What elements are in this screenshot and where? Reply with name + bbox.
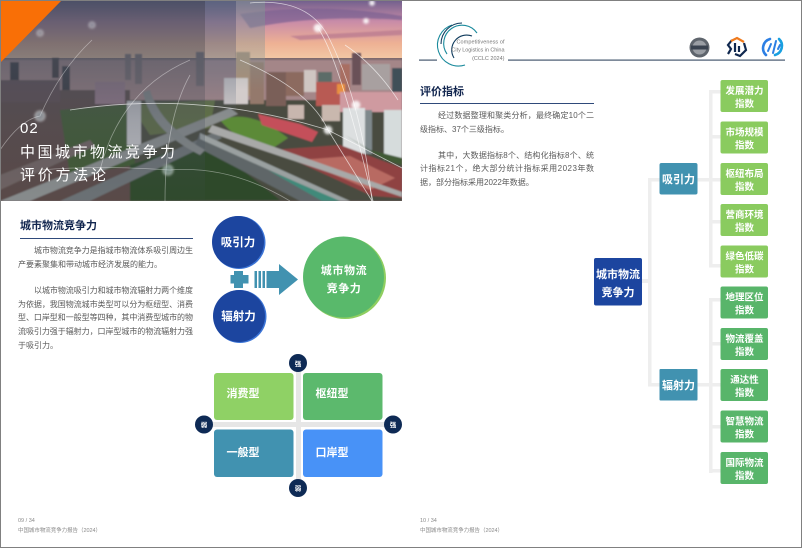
tile: 一般型: 一般型 [226, 445, 260, 459]
right page header logo: Competitiveness of [456, 40, 505, 46]
leaf: 物流覆盖指数 [720, 328, 768, 360]
node: 辐射力 [660, 369, 698, 400]
partner logo: KJ mark [728, 38, 746, 56]
left body text: 型、口岸型和一般型等四种，其中消费型城市的物 [18, 312, 193, 322]
left heading: 城市物流竞争力 [20, 218, 97, 232]
left body text: 为依据，我国物流城市类型可以分为枢纽型、消费 [18, 299, 193, 309]
tile: 枢纽型 [303, 373, 382, 420]
axis badge: top strong [289, 354, 307, 372]
hero title: 中国城市物流竞争力 [20, 143, 175, 161]
concept diagram: attraction + radiation = competitiveness [212, 216, 386, 343]
leaf: 通达性指数 [720, 369, 768, 401]
tree connectors [642, 90, 721, 473]
tree root: 城市物流竞争力 [594, 258, 642, 306]
axis badge: bottom weak: 弱 [295, 484, 302, 492]
leaf: 绿色低碳指数: 指数 [735, 264, 754, 276]
footer left [18, 518, 101, 534]
circle: 辐射力 [213, 290, 266, 343]
orange corner triangle [1, 0, 62, 62]
circle: 城市物流竞争力 [303, 236, 386, 319]
leaf: 枢纽布局指数: 枢纽布局 [725, 168, 764, 180]
leaf: 地理区位指数: 地理区位 [725, 292, 764, 304]
right page header logo: City Logistics in China [452, 48, 505, 54]
skyline right [316, 82, 340, 106]
leaf: 营商环境指数: 营商环境 [725, 209, 764, 221]
leaf: 智慧物流指数: 智慧物流 [725, 416, 764, 428]
right body text: 经过数据整理和聚类分析，最终确定10个二 [438, 110, 594, 120]
right heading rule [420, 103, 594, 104]
icon: plus [230, 271, 248, 288]
node: 辐射力: 辐射力 [662, 378, 695, 392]
hero title [20, 120, 175, 184]
left skyline [10, 62, 19, 80]
left body text: 以城市物流吸引力和城市物流辐射力两个维度 [34, 285, 193, 295]
right body text: 计指标21个，绝大部分统计指标采用2023年数 [420, 163, 594, 173]
tile: 口岸型 [303, 430, 382, 477]
node: 吸引力 [660, 163, 698, 194]
tile: 枢纽型: 枢纽型 [316, 386, 348, 400]
greenery and red roofs [220, 117, 288, 150]
right body text: 其中，大数据指标8个、结构化指标8个、统 [438, 150, 594, 160]
right body text: 据，部分指标采用2022年数据。 [420, 177, 534, 187]
leaf: 物流覆盖指数: 指数 [735, 346, 754, 358]
right heading: 评价指标 [420, 84, 464, 98]
axis badge: left weak: 弱 [201, 421, 208, 429]
leaf: 国际物流指数 [720, 452, 768, 484]
leaf: 通达性指数: 指数 [735, 387, 754, 399]
network arcs and glowing nodes [0, 0, 402, 201]
axis badge: bottom weak [289, 479, 307, 497]
footer left: 中国城市物流竞争力报告（2024） [18, 526, 101, 534]
right body text [420, 110, 594, 187]
hero photo: city skyline with network arcs [0, 0, 402, 201]
axis badge: right strong: 强 [390, 421, 397, 429]
footer left: 09 / 34 [18, 518, 35, 524]
towers [343, 108, 365, 154]
tile: 消费型: 消费型 [226, 386, 260, 400]
leaf: 发展潜力指数: 发展潜力 [725, 85, 764, 97]
leaf: 营商环境指数: 指数 [735, 222, 754, 234]
left body text: 流吸引力强于辐射力，口岸型城市的物流辐射力强 [18, 326, 193, 336]
left body text: 于吸引力。 [18, 340, 58, 350]
base ground colours [0, 60, 402, 105]
leaf: 国际物流指数: 指数 [735, 470, 754, 482]
circle: 城市物流竞争力: 城市物流 [321, 263, 367, 277]
footer right: 10 / 34 [420, 518, 437, 524]
left heading rule [20, 238, 193, 239]
leaf: 智慧物流指数: 指数 [735, 428, 754, 440]
leaf: 绿色低碳指数 [720, 246, 768, 278]
right page header logo: (CCLC 2024) [472, 56, 505, 62]
leaf: 市场规模指数 [720, 122, 768, 154]
tree root: 城市物流竞争力: 竞争力 [602, 285, 634, 299]
leaf: 枢纽布局指数 [720, 163, 768, 195]
hero title: 02 [20, 120, 39, 137]
circle: 城市物流竞争力: 竞争力 [327, 281, 361, 295]
quadrant matrix [195, 354, 402, 497]
partner logo: round seal [690, 38, 710, 58]
hero title: 评价方法论 [20, 167, 106, 184]
leaf: 市场规模指数: 指数 [735, 140, 754, 152]
circle: 辐射力: 辐射力 [221, 309, 256, 323]
partner logo: blue ring [763, 39, 782, 55]
axis badge: left weak [195, 416, 213, 434]
axis badge: top strong: 强 [295, 360, 302, 368]
tile: 口岸型: 口岸型 [316, 445, 348, 459]
tile: 一般型 [214, 430, 294, 477]
hero dark overlay bands [1, 1, 265, 176]
right page header logo [437, 23, 505, 66]
axis badge: right strong [384, 416, 402, 434]
circle: 吸引力 [212, 216, 266, 269]
node: 吸引力: 吸引力 [662, 172, 695, 186]
right body text: 级指标、37个三级指标。 [420, 124, 509, 134]
leaf: 地理区位指数: 指数 [735, 304, 754, 316]
leaf: 通达性指数: 通达性 [730, 374, 759, 386]
left body text: 城市物流竞争力是指城市物流体系吸引周边生 [34, 245, 193, 255]
leaf: 物流覆盖指数: 物流覆盖 [725, 333, 764, 345]
header rule [419, 60, 785, 61]
leaf: 智慧物流指数 [720, 410, 768, 442]
leaf: 枢纽布局指数: 指数 [735, 181, 754, 193]
footer right [420, 518, 503, 534]
tile: 消费型 [214, 373, 294, 420]
left body text: 产要素聚集和带动城市经济发展的能力。 [18, 259, 162, 269]
highways [0, 108, 238, 201]
leaf: 发展潜力指数: 指数 [735, 98, 754, 110]
leaf: 国际物流指数: 国际物流 [725, 457, 764, 469]
tree root: 城市物流竞争力: 城市物流 [596, 267, 640, 281]
leaf: 地理区位指数 [720, 286, 768, 318]
leaf: 营商环境指数 [720, 204, 768, 236]
left body text [18, 245, 193, 350]
leaf: 绿色低碳指数: 绿色低碳 [725, 250, 764, 262]
circle: 吸引力: 吸引力 [221, 235, 255, 249]
arrow [254, 264, 298, 295]
footer right: 中国城市物流竞争力报告（2024） [420, 526, 503, 534]
leaf: 发展潜力指数 [720, 80, 768, 112]
leaf: 市场规模指数: 市场规模 [725, 126, 764, 138]
